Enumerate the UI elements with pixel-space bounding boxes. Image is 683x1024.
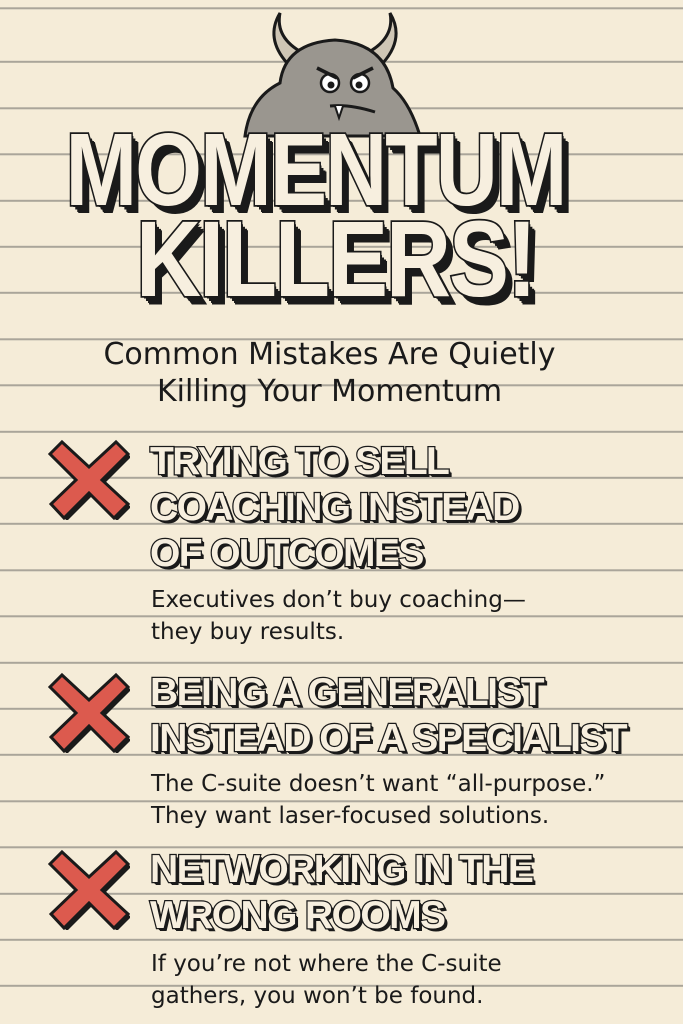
heading: TRYING TO SELL — [150, 440, 448, 483]
body: The C-suite doesn’t want “all-purpose.” — [151, 771, 605, 797]
heading: INSTEAD OF A SPECIALIST — [150, 717, 626, 760]
body: they buy results. — [151, 619, 344, 645]
item 2 — [48, 671, 630, 829]
heading — [148, 848, 536, 937]
icon: red x — [48, 850, 130, 930]
subtitle: Killing Your Momentum — [157, 374, 502, 409]
body — [150, 771, 605, 829]
body — [151, 587, 526, 645]
icon: red x — [48, 440, 130, 520]
item 1 — [48, 440, 526, 645]
title: MOMENTUM — [66, 112, 565, 228]
heading: WRONG ROOMS — [150, 894, 444, 937]
heading: BEING A GENERALIST — [150, 671, 543, 714]
heading: COACHING INSTEAD — [150, 486, 519, 529]
title — [66, 112, 569, 320]
heading — [150, 671, 630, 760]
heading — [149, 440, 522, 575]
heading: NETWORKING IN THE — [150, 848, 532, 891]
body — [151, 951, 502, 1009]
heading: OF OUTCOMES — [150, 532, 423, 575]
body: They want laser-focused solutions. — [151, 803, 549, 829]
subtitle: Common Mistakes Are Quietly — [103, 337, 556, 372]
title: KILLERS! — [136, 200, 535, 320]
body: If you’re not where the C-suite — [151, 951, 502, 977]
icon: red x — [48, 672, 130, 753]
subtitle — [103, 337, 556, 409]
body: Executives don’t buy coaching— — [151, 587, 526, 613]
body: gathers, you won’t be found. — [151, 983, 483, 1009]
item 3 — [48, 848, 536, 1009]
monster illustration — [243, 12, 420, 138]
